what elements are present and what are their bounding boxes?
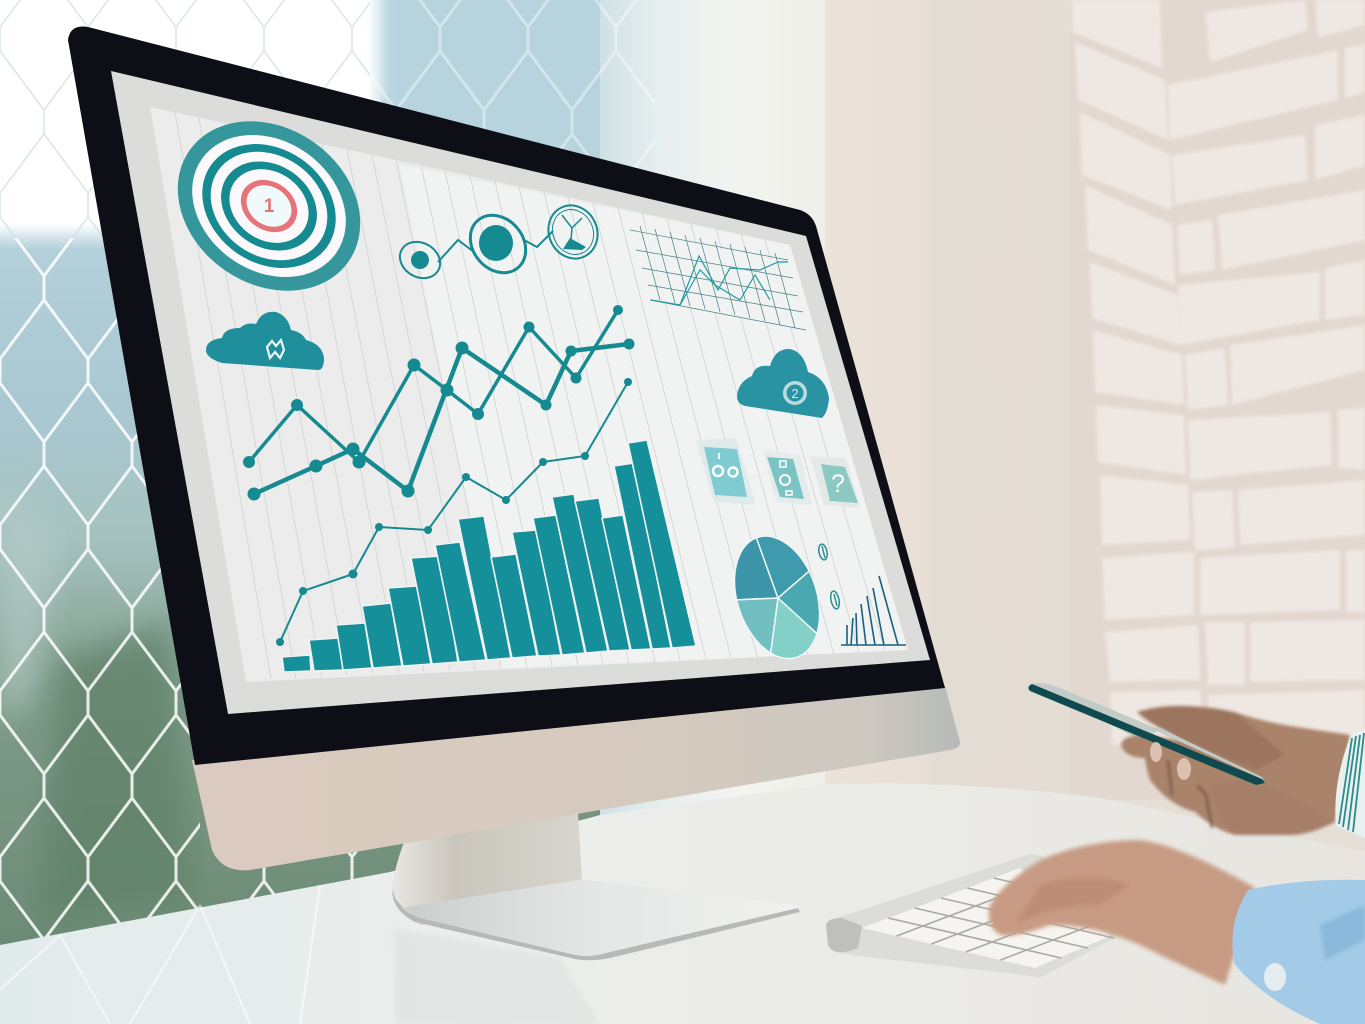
tile: question mark [810, 456, 860, 508]
beige wall [825, 0, 1085, 800]
phone edge [1028, 684, 1265, 785]
phone back surface [1032, 683, 1160, 740]
thin line chart [276, 378, 632, 646]
mini bar chart [841, 576, 906, 645]
blue shirt sleeve [1232, 880, 1365, 1024]
stand neck [393, 812, 600, 925]
thick line chart series B [243, 305, 623, 468]
hand holding phone [1121, 706, 1350, 835]
bar chart [282, 440, 696, 672]
cloud icon left [206, 312, 324, 370]
window background [0, 0, 832, 960]
striped shirt cuff [1335, 730, 1365, 838]
small line chart with grid [630, 226, 806, 330]
white desk [0, 783, 1365, 1024]
silver chin [192, 686, 960, 870]
brick wall [1070, 0, 1365, 800]
tile: speaker [763, 450, 812, 505]
connected circles icon [393, 197, 606, 285]
pie side marks [817, 543, 841, 610]
cuff button [1264, 963, 1286, 991]
target number: 1 [264, 196, 275, 217]
cloud icon right: 2 [791, 386, 799, 401]
cloud icon right [737, 349, 829, 418]
monitor stand [392, 812, 800, 960]
monitor body [68, 27, 960, 870]
icon tiles [696, 438, 860, 508]
fingernails [1150, 742, 1162, 762]
thick line chart series A [248, 338, 634, 500]
stand foot [392, 880, 799, 959]
pie chart [720, 525, 834, 670]
tile: question mark: ? [831, 470, 845, 498]
keyboard [826, 854, 1193, 978]
target icon [145, 86, 393, 326]
black bezel [68, 27, 945, 765]
hand on keyboard [989, 840, 1255, 985]
tile: dots [696, 438, 756, 505]
screen white panel [150, 107, 908, 682]
screen [111, 71, 930, 714]
